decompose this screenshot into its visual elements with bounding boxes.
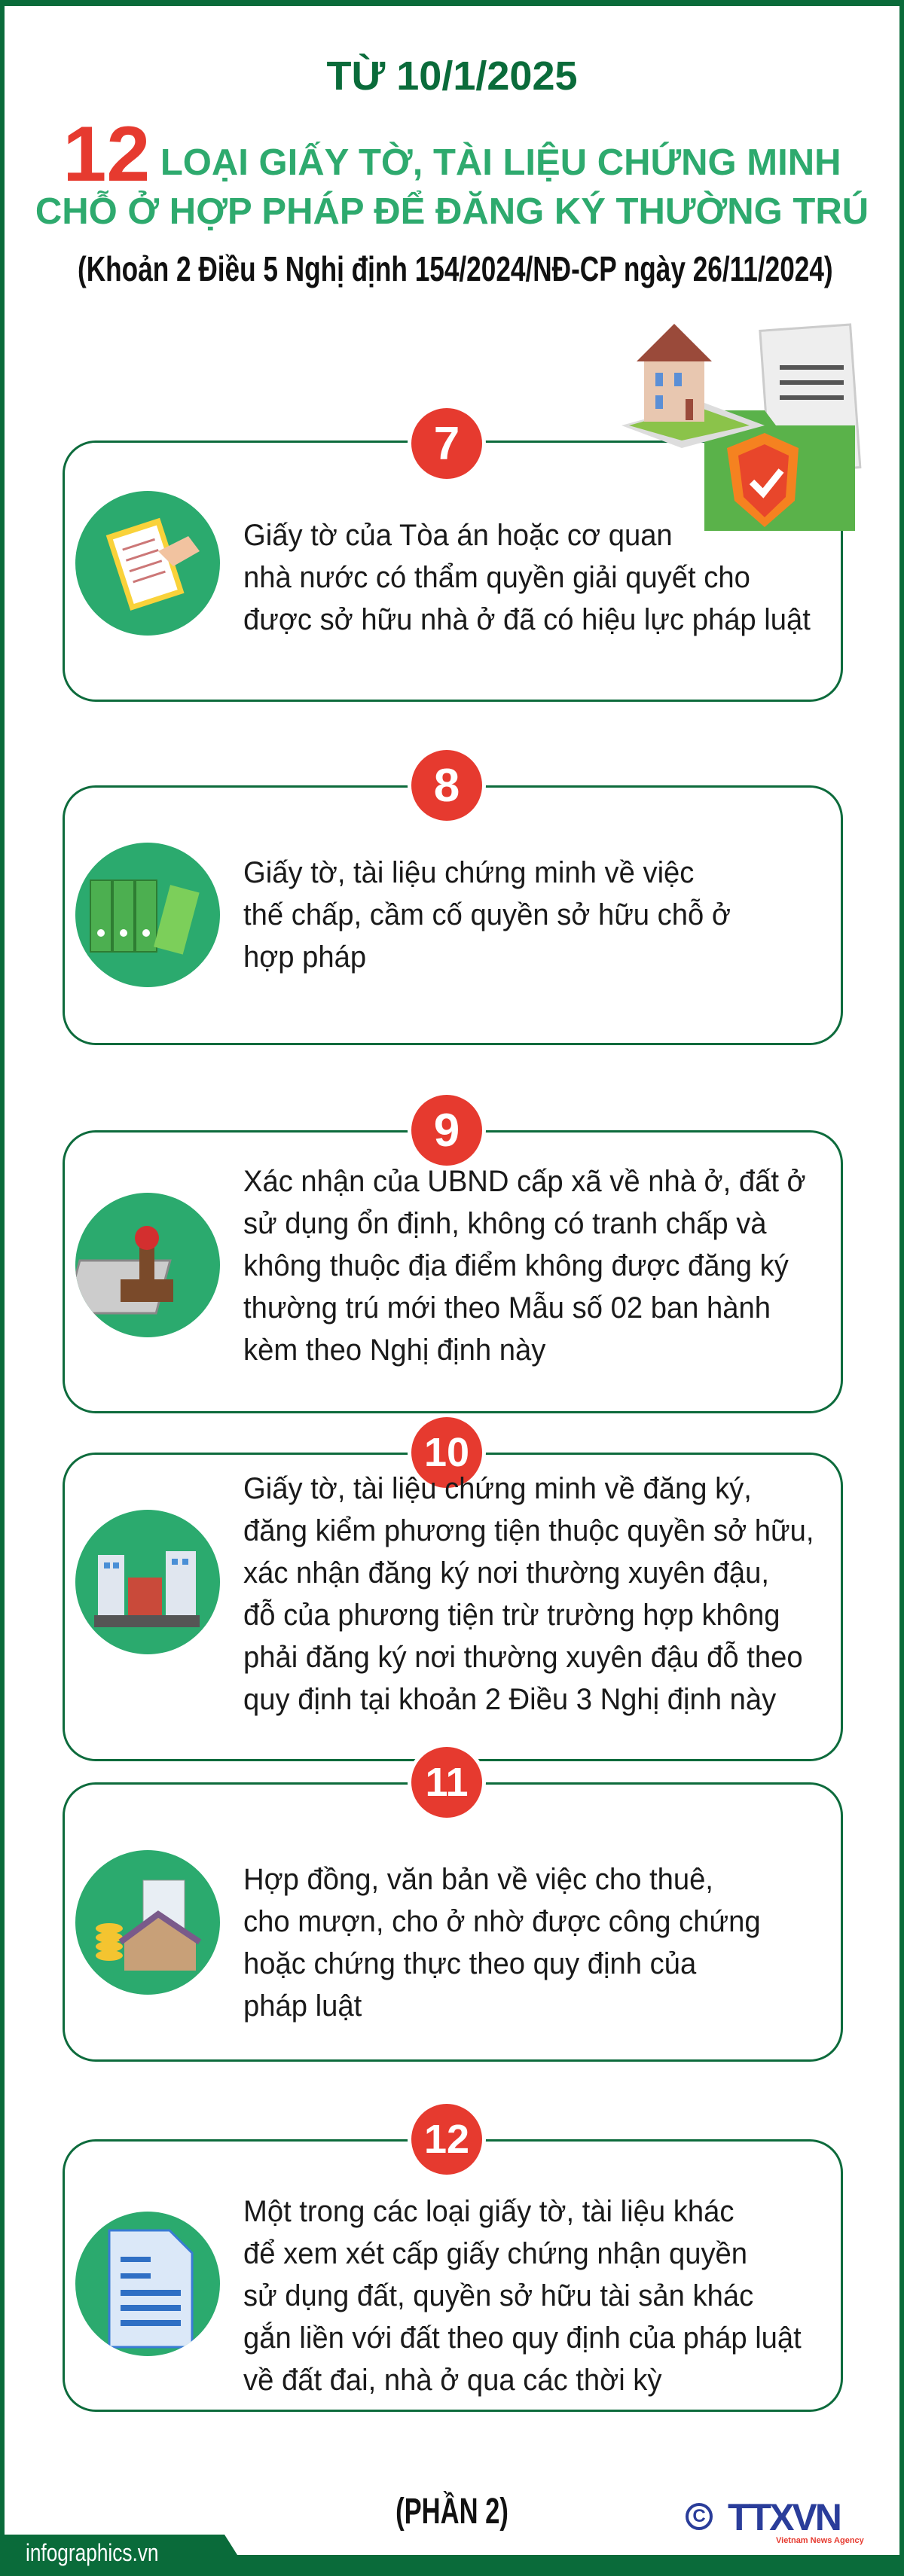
footer: TTXVN logo: Vietnam News Agency (776, 2536, 864, 2545)
item 12 (75, 2104, 802, 2397)
text 7: được sở hữu nhà ở đã có hiệu lực pháp luật (243, 603, 811, 636)
item 7 (75, 408, 811, 636)
number 12 (408, 2100, 486, 2178)
footer: TTXVN logo: C (692, 2506, 706, 2526)
text 10: đỗ của phương tiện trừ trường hợp không (243, 1599, 780, 1632)
footer: website: infographics.vn (26, 2539, 158, 2566)
number 9: 9 (434, 1104, 460, 1157)
footer: TTXVN logo: TTXVN (728, 2496, 840, 2538)
text 9: kèm theo Nghị định này (243, 1334, 545, 1367)
text 12: về đất đai, nhà ở qua các thời kỳ (243, 2364, 662, 2397)
footer: green band (5, 2535, 899, 2571)
footer: TTXVN logo (686, 2496, 864, 2545)
subtitle: (Khoản 2 Điều 5 Nghị định 154/2024/NĐ-CP ngày 26/11/2024) (78, 249, 833, 288)
number 9 (408, 1091, 486, 1169)
text 12: gắn liền với đất theo quy định của pháp luật (243, 2321, 802, 2355)
box 9 (63, 1130, 843, 1413)
text 7: Giấy tờ của Tòa án hoặc cơ quan (243, 519, 673, 552)
text 10: Giấy tờ, tài liệu chứng minh về đăng ký, (243, 1472, 752, 1505)
number 11 (408, 1743, 486, 1821)
text 7 (243, 519, 811, 636)
item 11 (75, 1747, 761, 2023)
item 8 (75, 750, 731, 987)
text 11: pháp luật (243, 1989, 362, 2023)
text 11: Hợp đồng, văn bản về việc cho thuê, (243, 1863, 713, 1896)
text 11: hoặc chứng thực theo quy định của (243, 1947, 696, 1980)
text 12: Một trong các loại giấy tờ, tài liệu khác (243, 2195, 734, 2228)
text 11: cho mượn, cho ở nhờ được công chứng (243, 1905, 761, 1938)
text 10: phải đăng ký nơi thường xuyên đậu đỗ theo (243, 1641, 803, 1674)
box 8 (63, 785, 843, 1045)
title: line 2: 12 LOẠI GIẤY TỜ, TÀI LIỆU CHỨNG MINH (63, 111, 841, 198)
box 12 (63, 2139, 843, 2412)
item 10 (75, 1417, 814, 1716)
icon: binders (75, 843, 220, 987)
title: line 3: CHỖ Ở HỢP PHÁP ĐỂ ĐĂNG KÝ THƯỜNG TRÚ (35, 191, 869, 232)
text 9: Xác nhận của UBND cấp xã về nhà ở, đất ở (243, 1165, 806, 1198)
number 7: 7 (434, 417, 460, 470)
item 9 (75, 1095, 806, 1367)
number 8: 8 (434, 759, 460, 812)
text 8: hợp pháp (243, 940, 366, 974)
text 9: thường trú mới theo Mẫu số 02 ban hành (243, 1291, 771, 1325)
number 11: 11 (425, 1760, 469, 1805)
text 10: xác nhận đăng ký nơi thường xuyên đậu, (243, 1556, 769, 1590)
text 9 (243, 1165, 806, 1367)
text 8: Giấy tờ, tài liệu chứng minh về việc (243, 856, 694, 889)
text 10 (243, 1472, 814, 1716)
number 7 (408, 404, 486, 483)
box 7 (63, 441, 843, 702)
text 11 (243, 1863, 761, 2023)
text 9: sử dụng ổn định, không có tranh chấp và (243, 1207, 767, 1240)
text 8: thế chấp, cầm cố quyền sở hữu chỗ ở (243, 898, 731, 931)
icon: house and money (75, 1850, 220, 1995)
illustration: house, folder and shield (622, 323, 862, 531)
footer: part label: (PHẦN 2) (396, 2492, 508, 2532)
box 10 (63, 1453, 843, 1761)
text 10: quy định tại khoản 2 Điều 3 Nghị định này (243, 1683, 776, 1716)
icon: document (75, 2212, 220, 2356)
icon: city with vehicles (75, 1510, 220, 1654)
number 10 (408, 1413, 486, 1492)
text 7: nhà nước có thẩm quyền giải quyết cho (243, 561, 750, 594)
text 12: sử dụng đất, quyền sở hữu tài sản khác (243, 2279, 753, 2312)
number 12: 12 (424, 2117, 469, 2162)
icon: clipboard (75, 491, 220, 636)
text 9: không thuộc địa điểm không được đăng ký (243, 1249, 789, 1282)
box 11 (63, 1782, 843, 2062)
text 12 (243, 2195, 802, 2397)
text 8 (243, 856, 731, 974)
number 10: 10 (424, 1430, 469, 1475)
number 8 (408, 746, 486, 825)
text 12: để xem xét cấp giấy chứng nhận quyền (243, 2237, 747, 2270)
title: date: TỪ 10/1/2025 (326, 53, 578, 99)
icon: stamp on laptop (75, 1193, 220, 1337)
text 10: đăng kiểm phương tiện thuộc quyền sở hữu, (243, 1514, 814, 1547)
